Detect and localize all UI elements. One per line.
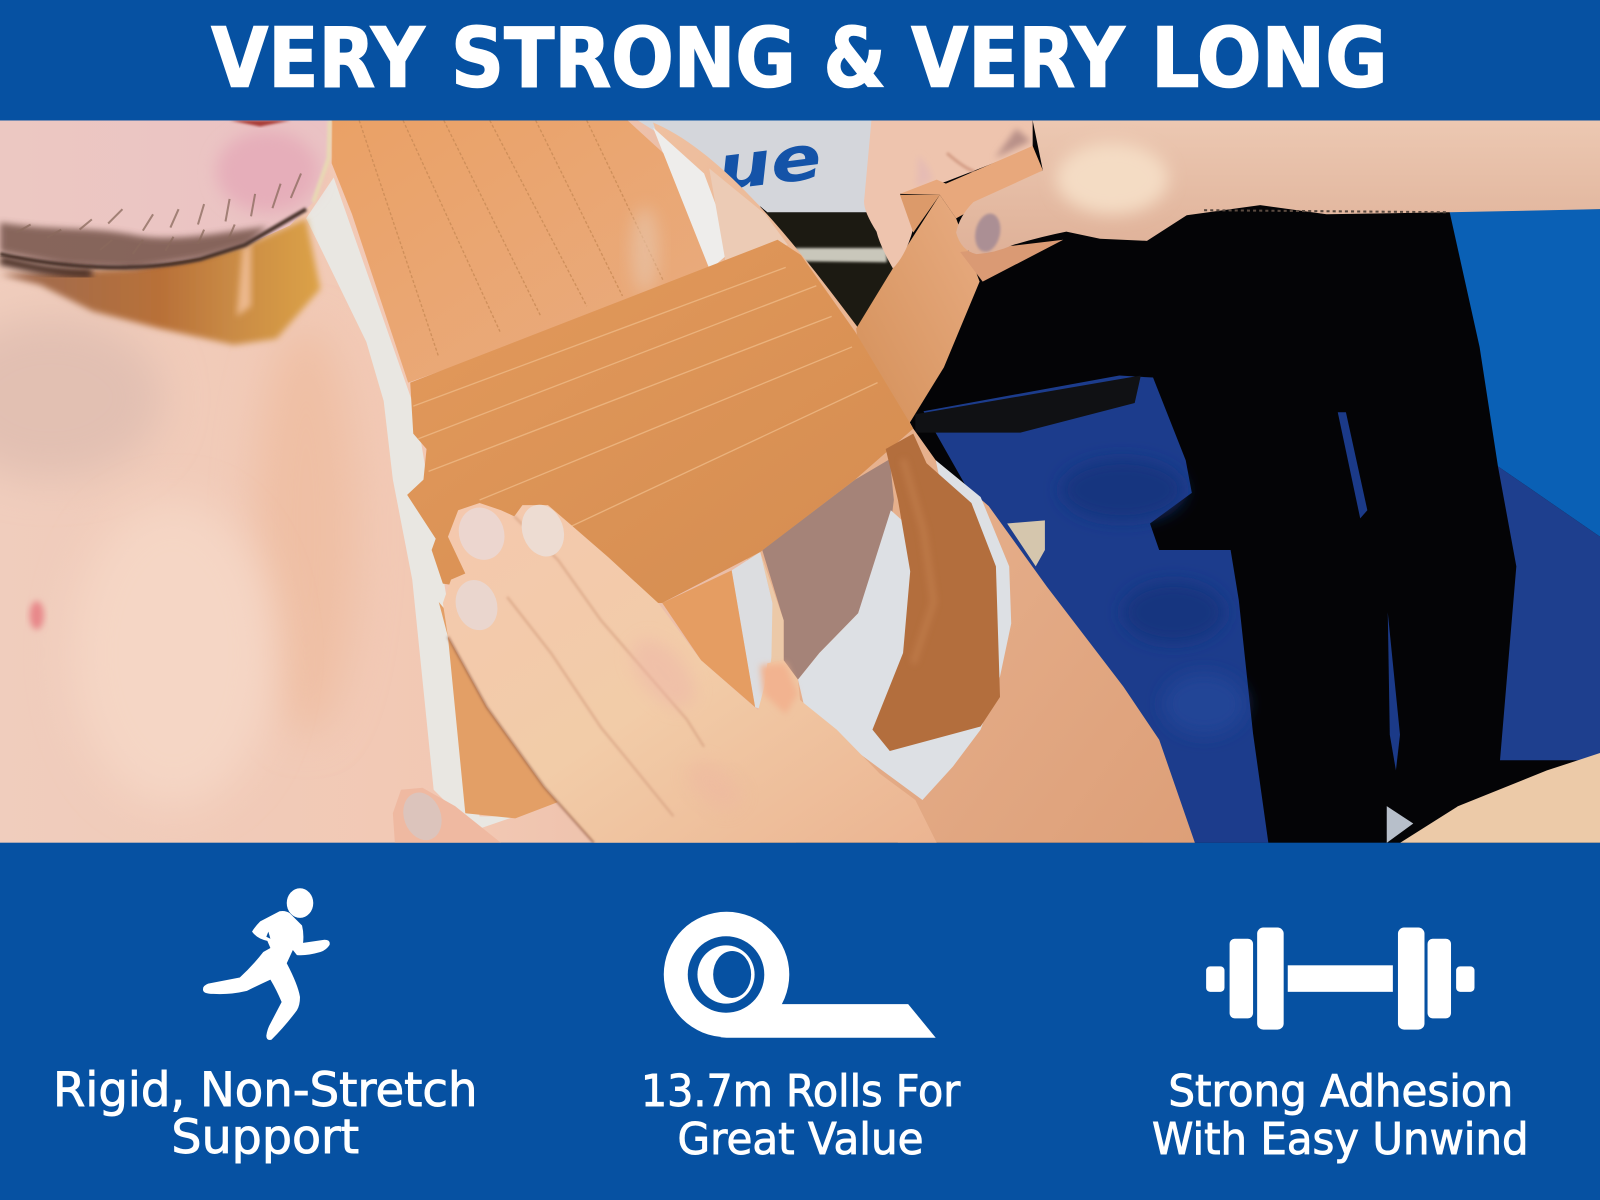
tape band across shoulder — [407, 240, 913, 603]
label: adhesion: With Easy Unwind — [1152, 1114, 1529, 1165]
neck fold highlight — [237, 241, 251, 316]
label: roll length: 13.7m Rolls For — [641, 1066, 961, 1117]
tape roll — [900, 146, 1043, 233]
label: rigid support: Support — [171, 1110, 359, 1165]
thumb at bottom — [393, 787, 501, 846]
title: VERY — [911, 12, 1125, 107]
pale sliver beside armpit — [760, 552, 784, 663]
chest shading — [0, 316, 357, 806]
white underwrap strip on shoulder — [653, 128, 725, 267]
tape strip bottom of chest — [439, 602, 558, 818]
tape running to roll — [856, 195, 980, 429]
tape under thumb — [960, 240, 1063, 282]
background: navy floor left — [923, 376, 1268, 843]
background: gap between trouser legs — [1338, 412, 1413, 843]
bottom benefits panel — [0, 843, 1600, 1200]
label: roll length: Great Value — [678, 1114, 923, 1165]
title: & — [823, 12, 886, 107]
label: rigid support: Rigid, Non-Stretch — [53, 1063, 478, 1118]
chair arm — [915, 376, 1141, 433]
background: bright blue wall — [1449, 209, 1600, 537]
title banner — [0, 0, 1600, 120]
label: adhesion: Strong Adhesion — [1168, 1066, 1513, 1117]
icon: dumbbell — [1206, 928, 1474, 1030]
title: STRONG — [451, 12, 796, 107]
vertical tape strips — [332, 120, 711, 383]
label: adhesion — [1152, 1066, 1529, 1165]
label: roll length — [641, 1066, 961, 1165]
white underwrap strip on chest — [306, 178, 515, 829]
photo: shoulder being taped — [0, 120, 1600, 846]
upper arm skin — [653, 122, 1195, 843]
label: rigid support — [53, 1063, 478, 1165]
white underwrap strip below band — [732, 552, 772, 710]
lower hand on shoulder — [443, 499, 937, 843]
beige box — [1007, 520, 1045, 566]
title: VERY — [211, 12, 425, 107]
face — [0, 120, 330, 273]
sign with partial logo — [638, 120, 872, 212]
icon: tape roll — [664, 912, 936, 1038]
upper hand thumb and forearm — [956, 120, 1600, 254]
upper hand fingers — [864, 120, 1033, 268]
title: LONG — [1151, 12, 1388, 107]
white underwrap on arm — [798, 460, 1011, 800]
skin patch on shoulder — [709, 168, 788, 267]
sign with partial logo: ue — [713, 122, 825, 205]
chest skin — [0, 120, 796, 843]
tape strip lower vertical — [662, 570, 755, 707]
brown tape end on arm — [872, 434, 1000, 751]
background: navy floor right — [1498, 466, 1600, 760]
title — [211, 12, 1388, 107]
background: dark bench and trousers — [760, 120, 1600, 843]
icon: runner — [203, 888, 330, 1040]
armpit skin — [762, 459, 894, 680]
neck shadow under chin — [0, 218, 320, 345]
forearm at bottom right — [1400, 753, 1600, 843]
